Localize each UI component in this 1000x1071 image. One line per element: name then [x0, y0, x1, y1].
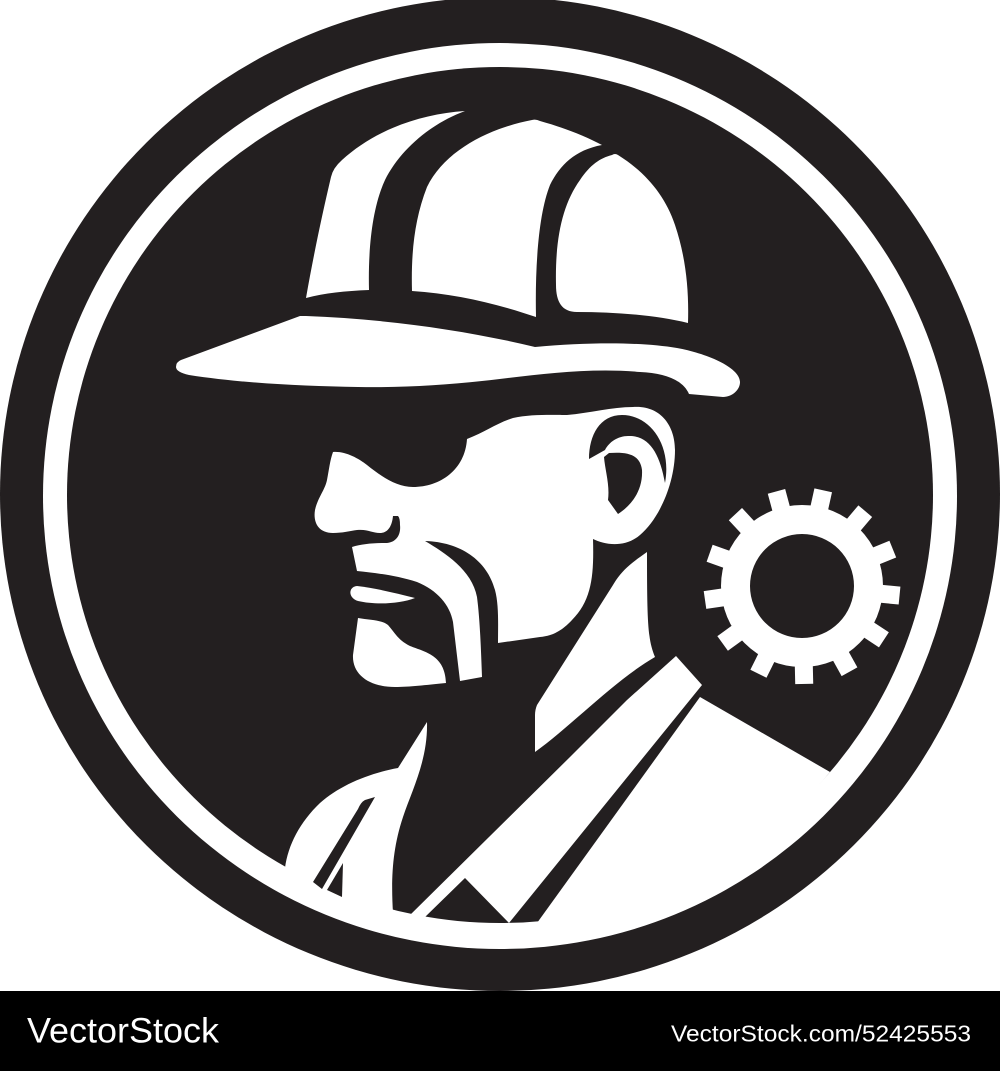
icon: shirt and shoulders	[285, 656, 830, 931]
footer logo text: VectorStock	[27, 1012, 220, 1050]
icon: gear	[704, 488, 900, 684]
footer image id: VectorStock.com/52425553	[671, 1020, 971, 1046]
footer bar	[0, 991, 1000, 1071]
icon: face profile	[315, 407, 675, 687]
beard	[353, 618, 446, 687]
ear	[589, 415, 666, 483]
icon: neck	[535, 552, 655, 752]
lip	[350, 586, 415, 603]
icon: hard hat	[176, 111, 740, 397]
